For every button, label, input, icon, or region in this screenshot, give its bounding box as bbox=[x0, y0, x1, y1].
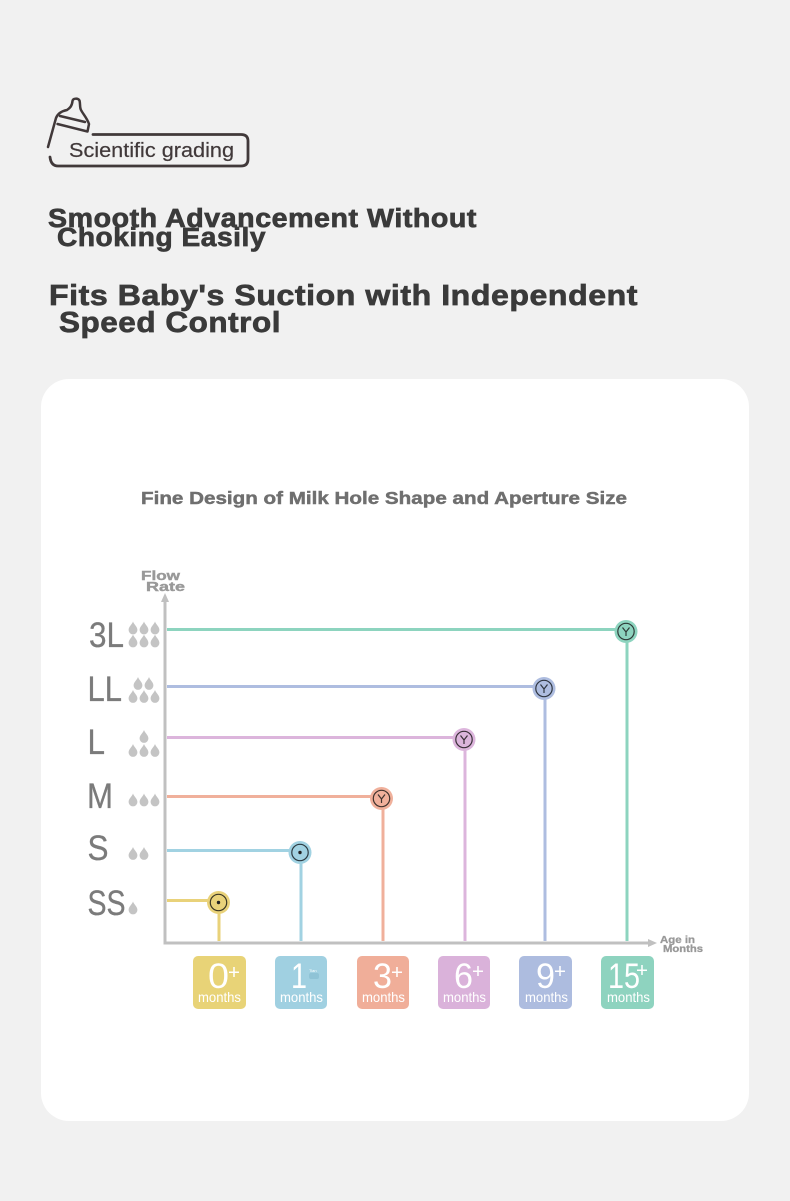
level SS: SS bbox=[88, 884, 126, 923]
level LL: LL bbox=[88, 670, 122, 709]
level M: M bbox=[87, 777, 113, 816]
series 3+ months bbox=[167, 787, 393, 941]
tile: 6+ months bbox=[438, 956, 490, 1009]
tile: 9+ months bbox=[519, 956, 572, 1009]
tile: 15+ months: 15 bbox=[608, 957, 640, 996]
icon: baby bottle bbox=[48, 99, 89, 147]
tile: 0+ months: months bbox=[198, 989, 241, 1005]
tile: 0+ months: + bbox=[228, 962, 240, 984]
tile: 15+ months: months bbox=[607, 989, 650, 1005]
badge: scientific grading bbox=[48, 99, 248, 166]
tile: 1 month bbox=[275, 956, 327, 1009]
axis label: flow rate: Rate bbox=[146, 579, 185, 594]
heading: fits baby's suction bbox=[49, 280, 638, 339]
tile: 9+ months: months bbox=[525, 989, 568, 1005]
chart: flow rate by age bbox=[87, 568, 703, 1009]
series 6+ months bbox=[167, 728, 476, 941]
panel: white card bbox=[41, 379, 749, 1121]
badge outline bbox=[50, 134, 248, 166]
tile: 3+ months: 3 bbox=[373, 957, 392, 996]
series 0+ months bbox=[167, 891, 230, 941]
level L: L bbox=[88, 723, 105, 762]
tile: 9+ months: + bbox=[554, 961, 566, 983]
tile: 15+ months bbox=[601, 956, 654, 1009]
tile: 3+ months bbox=[357, 956, 409, 1009]
tile: 6+ months: + bbox=[472, 961, 484, 983]
tile: 6+ months: 6 bbox=[454, 957, 473, 996]
chart title: Fine Design of Milk Hole Shape and Aperture Size bbox=[141, 488, 627, 508]
axis label: age in months: Age in bbox=[660, 935, 695, 946]
tile: 1 month: 1 bbox=[291, 957, 307, 996]
tile: 6+ months: months bbox=[443, 989, 486, 1005]
axis label: flow rate: Flow bbox=[141, 568, 181, 583]
tile: 3+ months: + bbox=[391, 962, 403, 984]
heading: smooth advancement: Choking Easily bbox=[57, 224, 266, 252]
heading: fits baby's suction: Fits Baby's Suction with Independent bbox=[49, 280, 638, 312]
tile: 9+ months: 9 bbox=[536, 957, 555, 996]
axis label: age in months: Months bbox=[663, 944, 703, 955]
level LL bbox=[88, 670, 159, 709]
tile: 1 month: Tian bbox=[309, 968, 317, 973]
badge label: Scientific grading bbox=[69, 140, 234, 162]
level 3L: 3L bbox=[89, 616, 124, 655]
axis label: flow rate bbox=[141, 568, 185, 594]
level S: S bbox=[88, 829, 108, 868]
heading: smooth advancement bbox=[48, 205, 477, 252]
series 15+ months bbox=[167, 620, 638, 941]
tile: 0+ months: 0 bbox=[208, 957, 229, 996]
heading: fits baby's suction: Speed Control bbox=[59, 307, 281, 339]
level L bbox=[88, 723, 159, 762]
series 1 month bbox=[167, 841, 312, 941]
axis label: age in months bbox=[660, 935, 703, 955]
tile: 1 month: months bbox=[280, 989, 323, 1005]
tile: 0+ months bbox=[193, 956, 246, 1009]
level M bbox=[87, 777, 159, 816]
heading: smooth advancement: Smooth Advancement Without bbox=[48, 205, 477, 233]
level 3L bbox=[89, 616, 159, 655]
axes bbox=[161, 593, 657, 947]
tile: 15+ months: + bbox=[636, 960, 648, 982]
series 9+ months bbox=[167, 677, 556, 941]
level S bbox=[88, 829, 148, 868]
tile: 3+ months: months bbox=[362, 989, 405, 1005]
